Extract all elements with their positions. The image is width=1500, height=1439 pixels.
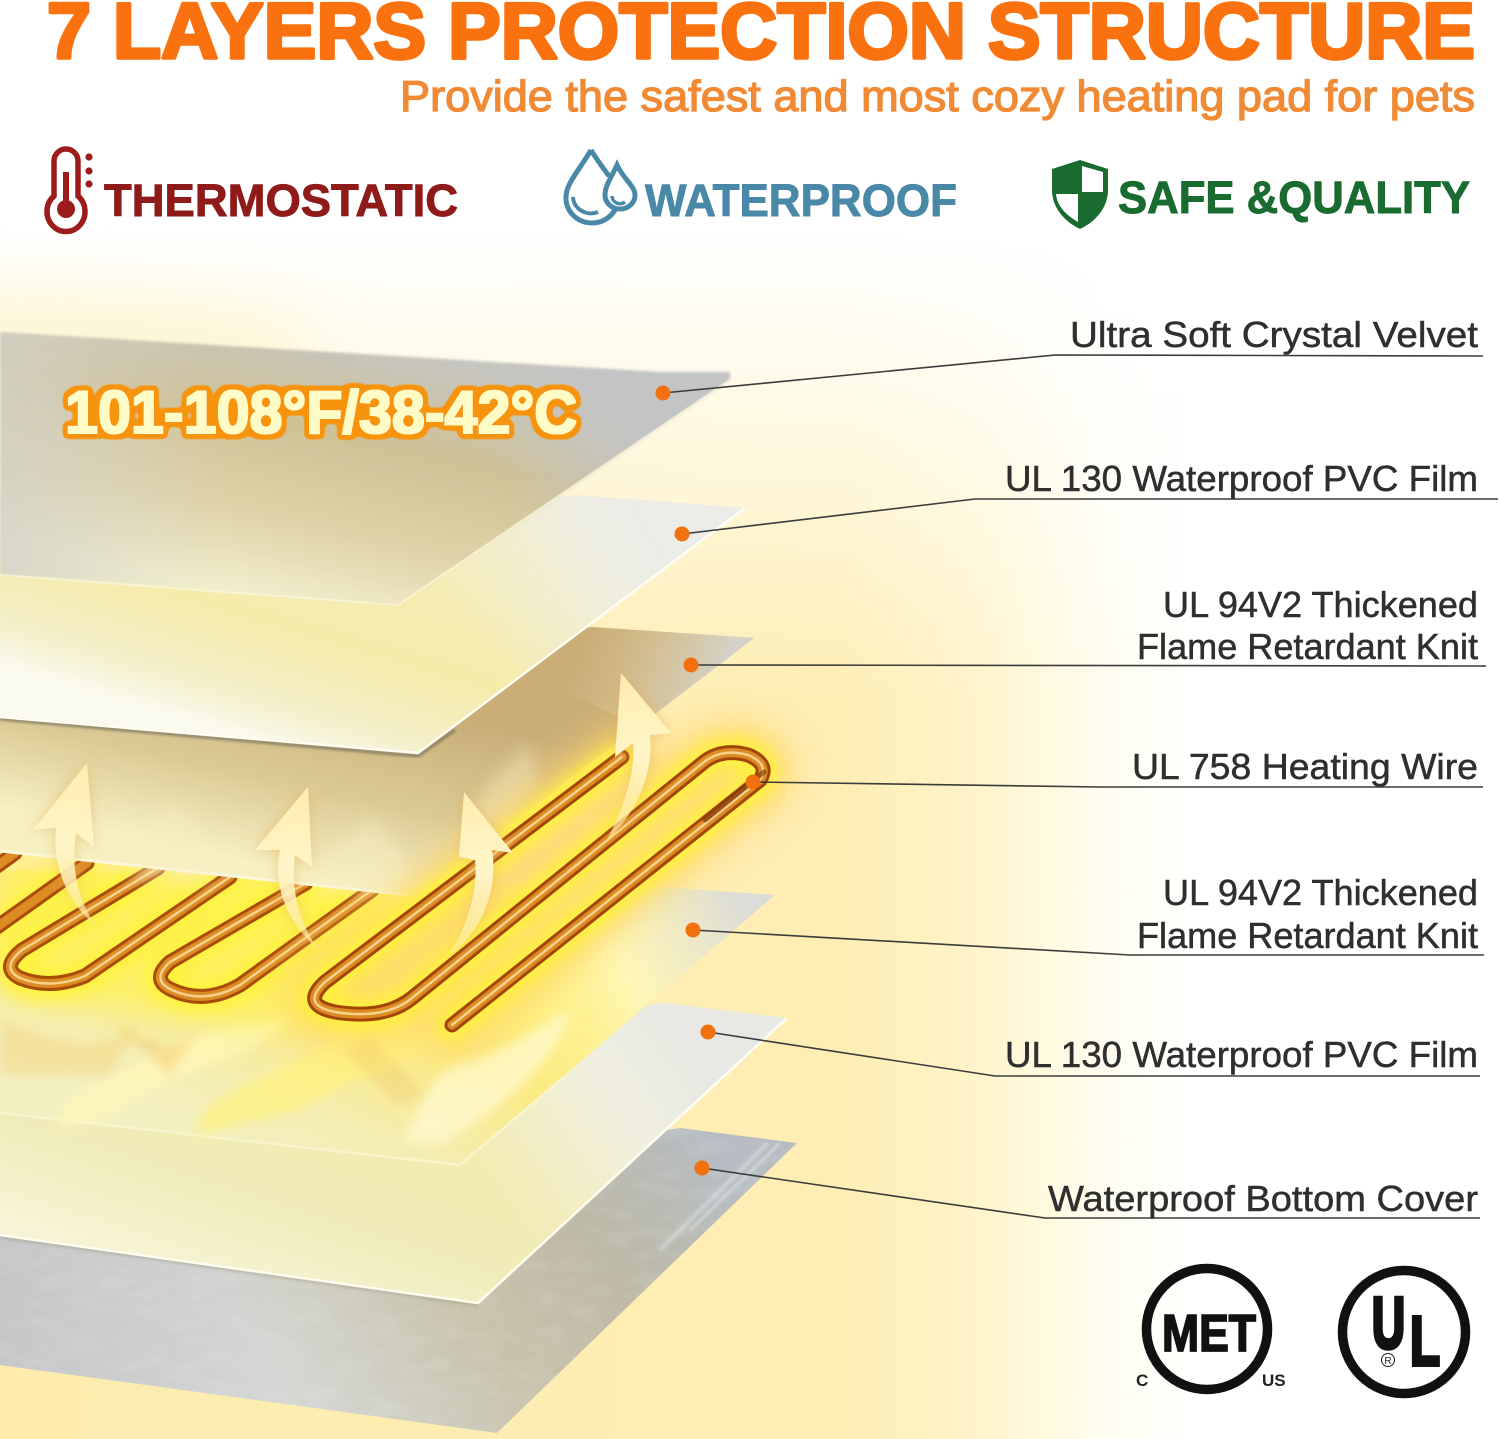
layer 5: lower knit with flames [0, 870, 775, 1165]
icon: MET certification mark [1136, 1268, 1286, 1390]
icon: MET certification mark: US [1262, 1371, 1286, 1390]
callout: UL 94V2 Thickened Flame Retardant Knit (top): Flame Retardant Knit [1137, 626, 1478, 667]
label: safe and quality: SAFE &QUALITY [1118, 172, 1470, 223]
callout: Ultra Soft Crystal Velvet: Ultra Soft Crystal Velvet [1070, 314, 1478, 355]
feature: thermostatic [47, 149, 458, 232]
icon: water drops [566, 150, 635, 223]
icon: thermometer [47, 149, 93, 232]
callout: UL 130 Waterproof PVC Film (top) [674, 458, 1498, 542]
callout: UL 130 Waterproof PVC Film (bottom): UL 130 Waterproof PVC Film [1005, 1034, 1478, 1075]
callout: UL 94V2 Thickened Flame Retardant Knit (bottom): UL 94V2 Thickened [1163, 872, 1478, 913]
callout: UL 130 Waterproof PVC Film (top): UL 130 Waterproof PVC Film [1005, 458, 1478, 499]
layer 1: crystal velvet [0, 332, 730, 605]
callout: Ultra Soft Crystal Velvet [656, 314, 1483, 400]
arrow 2 [255, 787, 319, 950]
callout: Waterproof Bottom Cover: Waterproof Bottom Cover [1048, 1178, 1478, 1219]
callout: UL 94V2 Thickened Flame Retardant Knit (top) [684, 584, 1486, 672]
layer 3: upper knit [0, 627, 754, 896]
icon: MET certification mark: C [1136, 1371, 1148, 1390]
heating wire: lower run [0, 853, 430, 1030]
callout: UL 94V2 Thickened Flame Retardant Knit (bottom) [686, 872, 1484, 956]
layer 6: PVC film [0, 1003, 787, 1305]
callout: UL 94V2 Thickened Flame Retardant Knit (top): UL 94V2 Thickened [1163, 584, 1478, 625]
callout: UL 758 Heating Wire: UL 758 Heating Wire [1132, 746, 1478, 787]
label: waterproof: WATERPROOF [645, 175, 957, 226]
layer 2: upper PVC film [0, 495, 745, 756]
subtitle: Provide the safest and most cozy heating pad for pets [400, 72, 1475, 121]
feature: waterproof [566, 150, 957, 226]
illustration: layered heating pad [0, 332, 797, 1433]
layer 7: bottom cover [0, 1128, 797, 1433]
arrow 3 [449, 792, 513, 955]
arrow 1 [33, 763, 97, 927]
icon: UL certification mark: U [1372, 1284, 1405, 1364]
feature: safe and quality [1052, 160, 1470, 229]
icon: UL certification mark: R [1384, 1356, 1392, 1367]
flames [0, 1010, 570, 1145]
faint flames on knit [130, 745, 536, 895]
icon: MET certification mark: MET [1162, 1305, 1256, 1363]
temperature callout: 101-108°F/38-42°C [65, 379, 577, 446]
icon: shield [1052, 160, 1108, 229]
icon: UL certification mark: L [1410, 1302, 1440, 1380]
callout: UL 94V2 Thickened Flame Retardant Knit (bottom): Flame Retardant Knit [1137, 915, 1478, 956]
callout: Waterproof Bottom Cover [694, 1160, 1480, 1219]
arrow 4 [607, 673, 671, 840]
callout: UL 130 Waterproof PVC Film (bottom) [700, 1024, 1480, 1076]
label: thermostatic: THERMOSTATIC [104, 175, 458, 226]
callout: UL 758 Heating Wire [746, 746, 1483, 790]
icon: UL certification mark [1342, 1270, 1466, 1394]
heat arrows [33, 673, 671, 955]
heating wire: front run [315, 753, 764, 1025]
